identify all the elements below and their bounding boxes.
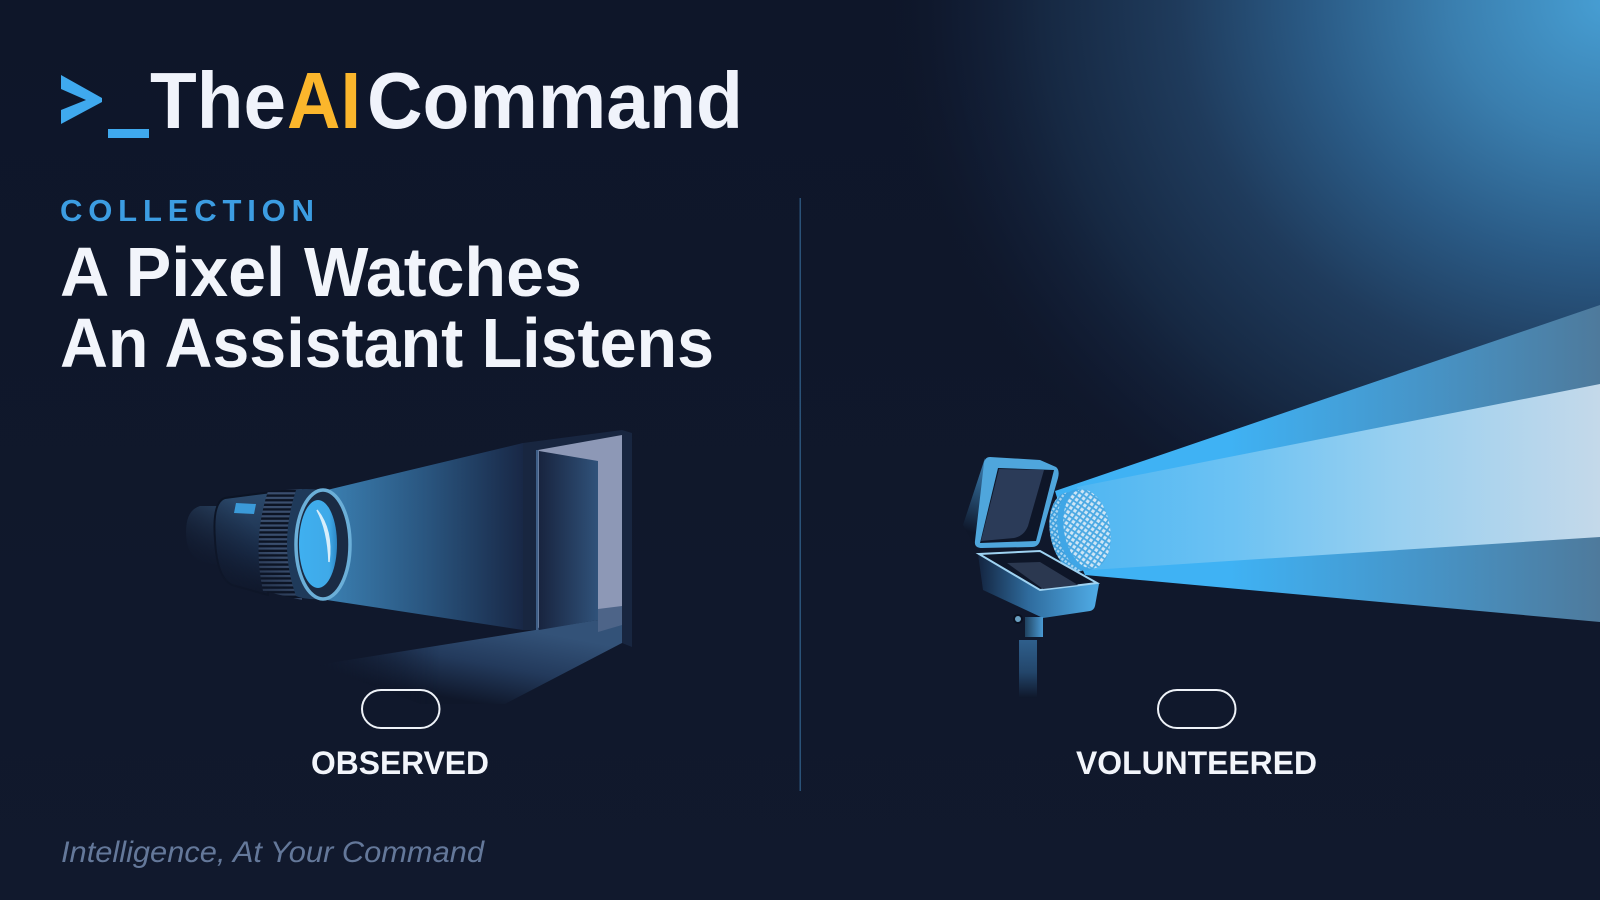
camera front barrel [287, 489, 323, 599]
camera blue label [234, 503, 256, 514]
grille front [1057, 486, 1117, 572]
title [60, 233, 714, 382]
inner beam [1077, 384, 1600, 570]
title line 2: An Assistant Listens [60, 304, 714, 382]
camera ribbed focus ring [259, 489, 302, 600]
doorway floor [598, 606, 622, 632]
lid screen [981, 469, 1044, 541]
recorder lid side [963, 458, 985, 547]
tray panel [1007, 562, 1078, 589]
recorder base body [978, 552, 1099, 618]
stem collar [1025, 617, 1043, 637]
logo word AI: AI [287, 56, 361, 145]
camera body [186, 489, 350, 600]
door jamb [536, 450, 538, 630]
recorder base tray [979, 551, 1097, 590]
door outer frame [523, 430, 632, 647]
eyebrow label: COLLECTION [60, 193, 314, 228]
grille rim [1051, 485, 1113, 575]
logo word Command: Command [367, 56, 743, 145]
lens rim [296, 490, 350, 599]
observed pill [362, 690, 440, 728]
stem [1019, 640, 1037, 698]
open door panel [539, 451, 598, 630]
camera rear section [186, 506, 216, 548]
logo [61, 56, 743, 145]
top-right light glow [954, 0, 1600, 440]
observed label: OBSERVED [311, 745, 489, 781]
outer beam [1055, 305, 1600, 622]
logo prompt chevron [61, 75, 102, 124]
camera view cone [327, 443, 523, 630]
lid screen recess [980, 468, 1054, 543]
stem screw [1014, 615, 1022, 623]
title line 1: A Pixel Watches [60, 233, 582, 311]
mic grille [1043, 485, 1117, 575]
illustration: camera watching a doorway [61, 305, 1600, 869]
lens glass [299, 500, 337, 588]
volunteered pill [1158, 690, 1236, 728]
door floor light [360, 620, 622, 701]
tagline: Intelligence, At Your Command [61, 836, 485, 869]
logo word The: The [150, 56, 286, 145]
camera mid barrel [214, 493, 268, 576]
volunteered label: VOLUNTEERED [1076, 745, 1317, 781]
recorder lid [975, 457, 1059, 548]
grille back [1043, 489, 1103, 575]
center divider [800, 198, 801, 791]
illustration: microphone sound beam [963, 305, 1600, 698]
logo prompt underscore [108, 129, 149, 138]
door opening backlight [538, 435, 622, 628]
lens highlight [317, 510, 330, 562]
